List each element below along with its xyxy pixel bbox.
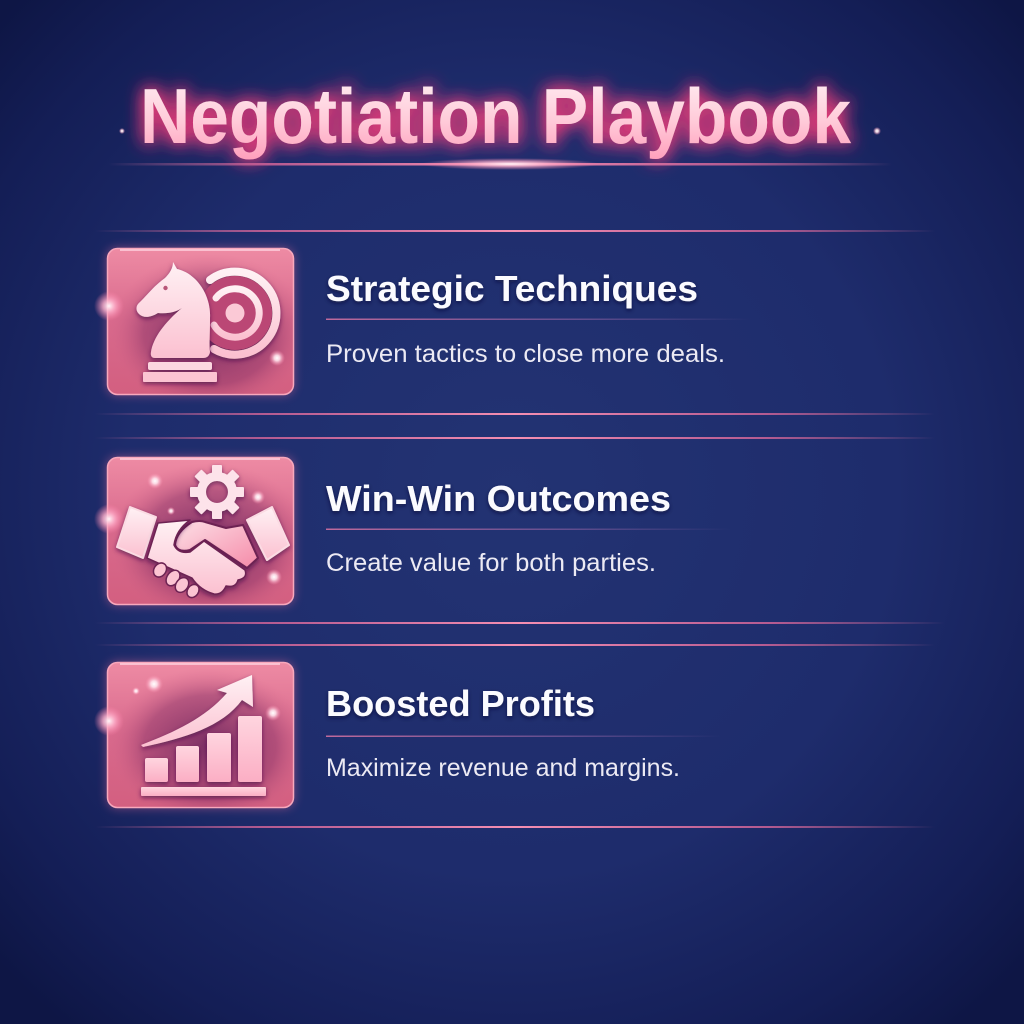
- icon: gear: [190, 465, 244, 519]
- divider lines: [95, 230, 945, 828]
- description: Proven tactics to close more deals.: [326, 340, 725, 368]
- panel: strategic techniques: [94, 248, 751, 395]
- description: Maximize revenue and margins.: [326, 754, 680, 782]
- description: Create value for both parties.: [326, 549, 656, 577]
- icon: title left sparkle: [119, 128, 125, 134]
- heading underline: [326, 318, 751, 320]
- heading: Win-Win Outcomes: [326, 478, 671, 519]
- heading: Boosted Profits: [326, 683, 595, 724]
- icon: right hand: [175, 521, 258, 568]
- icon: rising arrow: [141, 675, 253, 747]
- heading underline: [326, 528, 731, 530]
- heading underline: [326, 736, 721, 737]
- icon: right cuff: [247, 507, 289, 560]
- icon: fingers: [151, 560, 202, 600]
- icon card: bar chart with arrow: [94, 662, 294, 808]
- icon: chess knight: [136, 262, 217, 382]
- panel: win-win outcomes: [94, 457, 731, 605]
- icon: left hand: [147, 520, 246, 594]
- panel: boosted profits: [94, 662, 721, 808]
- title rule: [108, 158, 892, 170]
- icon: bars: [141, 716, 266, 796]
- icon: left cuff: [117, 507, 156, 558]
- icon card: handshake and gear: [94, 457, 294, 605]
- title: Negotiation Playbook: [140, 72, 852, 160]
- icon: title right sparkle: [873, 127, 881, 135]
- icon: target: [198, 272, 276, 355]
- icon card: chess knight and target: [94, 248, 294, 395]
- heading: Strategic Techniques: [326, 268, 698, 309]
